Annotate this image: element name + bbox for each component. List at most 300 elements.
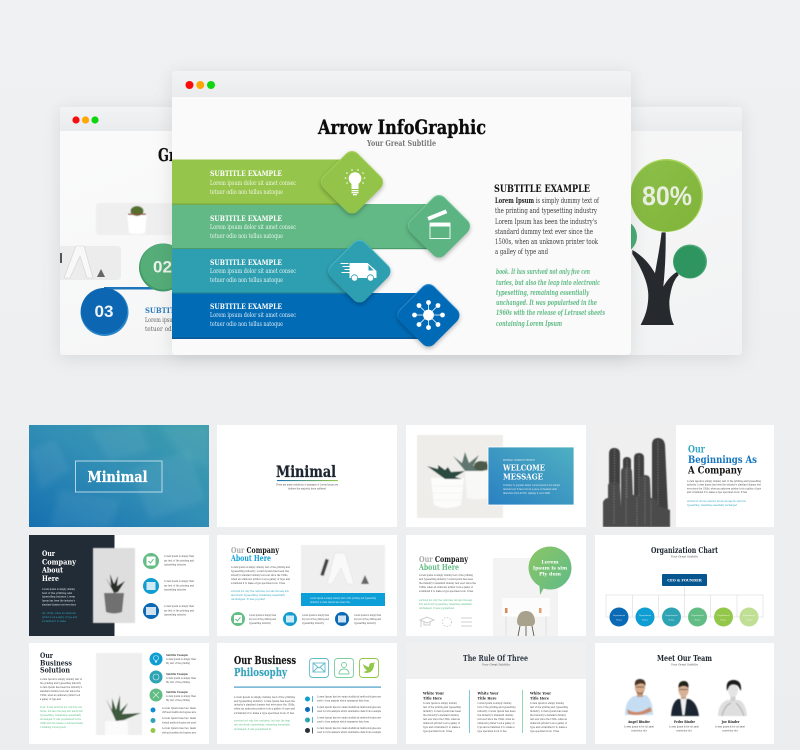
team captions <box>624 724 746 732</box>
letter A photo <box>60 246 121 280</box>
icon: delivery van <box>340 263 376 281</box>
team captions: Lorem ipsum dolor sit amet <box>624 724 655 728</box>
icon text: Subtitle Example <box>166 690 188 694</box>
column 3: text of the printing and typesetting <box>530 705 568 709</box>
check list text <box>317 694 381 734</box>
icon: check box <box>143 553 159 569</box>
slide 7: Our Company bubble <box>406 535 586 636</box>
column 1: text ever since the 1500s, when an <box>423 717 460 721</box>
speech bubble: Lorem <box>541 560 559 566</box>
welcome body: Contrary to popular belief, Lorem Ipsum is not simply <box>503 483 560 487</box>
department labels <box>613 614 755 622</box>
column 2: text of the printing and typesetting <box>478 705 516 709</box>
band 3 text <box>210 258 297 284</box>
slide background <box>406 643 586 744</box>
department labels: Name <box>746 620 753 622</box>
column 1: type and scrambled it to make a <box>423 725 460 729</box>
slide 11: The Rule Of Three <box>406 643 586 744</box>
department labels: Department <box>691 614 704 617</box>
icon row text: typesetting industry <box>302 621 324 625</box>
body text: Lorem Ipsum is simply dummy text of the printing and typesetting <box>687 479 761 483</box>
arrow band 3 <box>172 249 372 294</box>
subtitle fragment 03: SUBTITLE <box>145 306 185 315</box>
list text: typesetting industry <box>164 612 186 616</box>
column 1: unknown printer took a galley of <box>423 721 461 725</box>
teal text: survived not only five centuries, but also the leap into electronic <box>687 499 746 503</box>
teal text <box>42 611 77 623</box>
department labels: Name <box>720 620 727 622</box>
caption <box>276 482 338 490</box>
body text: Lorem Ipsum is simply dummy text of the printing and <box>231 565 290 569</box>
department labels: Department <box>665 614 678 617</box>
person: Joe Binder <box>718 680 747 716</box>
right column body text: the printing and typesetting industry <box>495 206 598 215</box>
slide 4: Our Beginnings <box>595 425 774 527</box>
plant photo <box>93 548 135 623</box>
body text: Lorem Ipsum is simply dummy text of the printing <box>234 695 295 699</box>
band 1 text: Lorem ipsum dolor sit amet consec <box>210 180 297 187</box>
right column green italic text: book. It has survived not only five cen <box>496 267 590 276</box>
diamond 3 with delivery van icon <box>325 237 394 306</box>
body text: when an unknown printer took a galley of type and <box>234 706 295 710</box>
check list: virtual methodologies are <box>161 730 196 734</box>
slide background <box>217 425 397 527</box>
body text: typesetting industry. Lorem Ipsum has been the <box>231 569 289 573</box>
band 3 text: SUBTITLE EXAMPLE <box>210 258 282 267</box>
80% circle <box>630 159 703 232</box>
green text: turies, but also the leap into electronic <box>40 709 83 713</box>
column 2 <box>477 690 516 733</box>
teal text: scrambled it to make <box>42 619 66 623</box>
check list <box>305 694 381 734</box>
welcome heading <box>502 462 545 482</box>
check list text: used to form analysis which summarize data from a sample <box>317 709 381 713</box>
heading: Company <box>42 558 77 566</box>
column 1: industry. Lorem Ipsum has been <box>423 709 461 713</box>
teal text <box>687 499 746 507</box>
heading: Our Company <box>419 554 468 564</box>
slide background <box>217 535 397 636</box>
department labels: Name <box>668 620 675 622</box>
body text: scrambled it to make a type specimen book. It has <box>234 711 294 715</box>
right column body text: a galley of type and <box>495 247 548 256</box>
heading: Our Business <box>234 653 296 667</box>
body text: 1500s, when an unknown printer took a galley of <box>419 585 474 589</box>
list text: Lorem Ipsum is simply than <box>164 554 194 558</box>
heading: Beginnings As <box>688 455 757 466</box>
green text <box>40 705 83 729</box>
slide background <box>29 643 209 744</box>
body text: the industry's standard dummy text ever since the <box>419 581 476 585</box>
band 4 text: Lorem ipsum dolor sit amet consec <box>210 312 297 319</box>
check list <box>150 706 196 734</box>
icon: window panel <box>335 612 349 626</box>
diamond 4 with network icon <box>394 281 463 350</box>
cover title: Minimal <box>88 468 148 486</box>
green text: unchanged. It was popularised in <box>234 727 271 731</box>
person: Angel Binder <box>625 679 653 715</box>
right column green italic text: typesetting, remaining essentially <box>496 288 590 297</box>
body text: ever since the 1500s, when an unknown printer took a galley of type <box>687 486 761 490</box>
band 3 text: Lorem ipsum dolor sit amet consec <box>210 268 297 275</box>
welcome body <box>503 483 560 495</box>
band 3 text: tetuer odio non tellus natoque <box>210 277 283 284</box>
desk photo <box>493 558 558 636</box>
team captions: consectetur odio <box>631 728 647 732</box>
arrow band 4 <box>172 293 437 339</box>
column 1: Title Here <box>423 696 442 700</box>
subtitle fragment 03: tetuer odio <box>145 326 177 333</box>
welcome heading: MESSAGE <box>503 472 543 482</box>
column 3: type specimen book. It has <box>530 729 559 733</box>
department labels: Department <box>743 614 755 617</box>
slide 12: Meet Our Team <box>595 643 774 744</box>
department labels: Name <box>694 620 701 622</box>
list text: my text of the printing and <box>164 584 194 588</box>
icon text <box>166 653 196 702</box>
title: Minimal <box>276 462 336 481</box>
list text: typesetting industry <box>164 562 186 566</box>
plant photo <box>417 435 503 518</box>
body text <box>687 479 762 494</box>
column 2: Lorem Ipsum is simply dummy <box>478 701 512 705</box>
speech bubble <box>528 547 572 595</box>
department circles <box>610 608 758 626</box>
check list text: used to form analysis which summarize data from <box>317 698 369 702</box>
green text: unchanged. It was popularised <box>419 606 454 610</box>
right column body text: Lorem Ipsum has been the industry's <box>495 217 597 226</box>
heading: Solution <box>40 666 70 674</box>
icon row text: my text of the printing and <box>249 617 276 621</box>
icon: bird square <box>360 658 378 678</box>
list text: my text of the printing and <box>164 608 194 612</box>
team captions: Lorem ipsum dolor sit amet <box>715 724 746 728</box>
person: Pedro Binder <box>671 681 699 716</box>
body text: text of the printing and <box>42 591 72 595</box>
subtitle fragment 03 <box>145 306 185 333</box>
column 3: type and scrambled it to make a <box>530 725 567 729</box>
icon row <box>231 612 381 626</box>
front window: Arrow InfoGraphic slide <box>172 71 631 355</box>
heading: Our <box>42 549 56 558</box>
body text: and typesetting industry. Lorem Ipsum has been <box>419 577 473 581</box>
tree trunk <box>632 232 679 325</box>
band 2 text: SUBTITLE EXAMPLE <box>210 214 282 223</box>
heading <box>230 545 279 563</box>
body text <box>234 695 295 715</box>
icon list <box>143 553 194 619</box>
body text <box>231 565 290 585</box>
column 3: the industry's standard dummy <box>530 713 566 717</box>
connector line <box>104 287 174 290</box>
team names <box>627 719 740 724</box>
welcome eyebrow: MINIMAL COMPANY PROFILE <box>503 458 535 462</box>
slide 8: Organization chart <box>595 535 774 636</box>
front window traffic lights <box>186 81 215 89</box>
department labels: Name <box>616 620 623 622</box>
green text: into electronic typesetting, remaining essentially <box>234 722 290 726</box>
check list: virtual methodologies are <box>161 710 196 714</box>
icon text: Subtitle Example <box>166 672 188 676</box>
teal text: typesetting, remaining essentially unchanged <box>687 503 737 507</box>
column 2: type and scrambled it to make a <box>478 725 515 729</box>
heading: Our <box>40 651 54 660</box>
subtitle: Your Great Subtitle <box>670 662 698 666</box>
circle 03 <box>80 288 128 336</box>
cactus photo <box>595 425 676 527</box>
column 3: White Your <box>529 690 552 696</box>
aloe photo <box>96 653 142 735</box>
band 1 text: SUBTITLE EXAMPLE <box>210 169 282 178</box>
welcome body: random text. It has roots in a piece of classical Latin <box>503 487 557 491</box>
column 1: the industry's standard dummy <box>423 713 459 717</box>
right column green italic text <box>496 267 605 328</box>
teal text: unchanged. It was popular <box>231 597 265 601</box>
heading: Our Company <box>231 545 279 555</box>
front plant <box>427 465 465 479</box>
heading <box>41 549 77 583</box>
icon row text: Lorem Ipsum is simply than <box>302 613 329 617</box>
body text: standard dummy text ever since <box>42 602 76 606</box>
column 1: type specimen book. It has <box>423 729 452 733</box>
divider rule <box>234 686 381 688</box>
subtitle: Your Great Subtitle <box>481 662 510 666</box>
team names: Angel Binder <box>627 719 651 724</box>
circle 03: 03 <box>94 302 114 321</box>
heading <box>234 653 296 679</box>
speech bubble: Ipsum is sim <box>533 566 567 572</box>
body text: industry's standard dummy text ever since the 1500s, <box>231 573 288 577</box>
cover title box <box>76 461 162 492</box>
green text: survived not only five centuries, but also the leap <box>419 598 472 602</box>
heading <box>687 444 757 476</box>
cover gradient background <box>29 425 209 527</box>
right column green italic text: turies, but also the leap into electronic <box>496 278 600 287</box>
tree chart <box>603 159 707 325</box>
slide background <box>406 425 586 527</box>
teal text: electronic typesetting, remaining essentially <box>231 593 285 597</box>
body text <box>419 573 476 593</box>
heading: About Here <box>230 553 271 563</box>
list text: typesetting industry <box>164 588 186 592</box>
band 2 text: Lorem ipsum dolor sit amet consec <box>210 224 297 231</box>
right column body text <box>495 196 600 256</box>
slide 10: Our Business Philosophy <box>217 643 397 744</box>
icon text: Subtitle Example <box>166 653 188 657</box>
department labels: Department <box>717 614 730 617</box>
band 4 text <box>210 302 297 328</box>
icon text: My text of the printing <box>166 698 190 702</box>
back plant <box>453 452 488 472</box>
team names: Joe Binder <box>721 719 740 724</box>
right column body text: 1500s, when an unknown printer took <box>495 237 598 246</box>
right column heading: SUBTITLE EXAMPLE <box>494 184 590 195</box>
body text <box>42 587 76 606</box>
circle 02: 02 <box>153 258 172 276</box>
column 2: the industry's standard dummy <box>478 713 514 717</box>
list text: Lorem Ipsum is simply than <box>164 579 194 583</box>
slide 9: Our Business Solution <box>29 643 209 744</box>
cactus photo <box>96 203 186 235</box>
heading: Philosophy <box>234 665 287 679</box>
icon: light bulb <box>345 169 365 195</box>
check list: Lorem Ipsum has two main <box>162 706 196 710</box>
green text: survived not only five centuries, but also the leap <box>234 718 290 722</box>
check list text: Lorem Ipsum has two main statistical methodologies are <box>317 726 381 730</box>
column 1: Lorem Ipsum is simply dummy <box>423 701 457 705</box>
grey icons <box>420 617 472 627</box>
right column green italic text: 1960s with the release of Letraset sheets <box>496 308 605 317</box>
icon: window panel <box>143 603 159 619</box>
slide 3: Welcome message <box>406 425 586 527</box>
heading: Here <box>42 574 59 583</box>
heading <box>40 651 72 674</box>
check list: virtual methodologies are used <box>161 720 196 724</box>
green text: typesetting, remaining essentially <box>40 713 81 717</box>
body text: standard dummy text ever since the <box>40 689 80 693</box>
letter A photo <box>301 545 385 593</box>
right column green italic text: containing Lorem Ipsum <box>496 319 562 328</box>
check list: Lorem Ipsum has two main <box>162 726 196 730</box>
heading: A Company <box>687 466 743 476</box>
title: Meet Our Team <box>657 653 712 663</box>
team captions: consectetur odio <box>676 728 692 732</box>
slide 6: Our Company About Here photo <box>217 535 397 636</box>
green text: into electronic typesetting, remaining essentially <box>419 602 472 606</box>
icon: teal circle <box>150 670 162 684</box>
green text <box>234 718 290 731</box>
diamond 1 with light bulb icon <box>318 148 386 217</box>
blue caption band: Lorem Ipsum is simply dummy text of the printing and typesetting <box>310 596 376 600</box>
body text: industry's standard dummy text ever since the 1500s, <box>234 702 295 706</box>
arrow band 2 <box>172 204 447 249</box>
column 3: unknown printer took a galley of <box>530 721 568 725</box>
band 2 text <box>210 214 297 240</box>
body text: Ipsum has been the industry's <box>42 598 75 602</box>
column 2: unknown printer took a galley of <box>478 721 515 725</box>
check list text: used to form analysis which summarize data from <box>317 720 369 724</box>
back pot <box>465 471 489 500</box>
check list text: Lorem Ipsum has two main statistical methodologies are <box>317 716 381 720</box>
subtitle fragment 03: Lorem ipsum <box>145 317 177 324</box>
blue caption band: industry Lorem Ipsum has been the <box>310 600 350 604</box>
icon row text: my text of the printing and <box>354 617 381 621</box>
heading: Business <box>40 658 72 668</box>
body text: scrambled it to make a type specimen book. It has <box>419 589 473 593</box>
column 3 <box>529 690 568 733</box>
diamond 2 with clapperboard icon <box>405 192 473 261</box>
arrow band 1 <box>172 160 357 205</box>
CEO box <box>662 574 707 586</box>
left leaf circle <box>603 220 637 254</box>
blue caption band <box>301 593 385 606</box>
check list text: Lorem Ipsum has two main statistical methodologies are <box>317 694 381 698</box>
department labels: Department <box>639 614 651 617</box>
icon text: My text of the printing <box>166 661 190 665</box>
right column body text: standard dummy text ever since the <box>495 227 593 236</box>
column 3: Title Here <box>530 696 549 700</box>
department labels: Name <box>642 620 649 622</box>
teal text: the 1500s, when an unknown <box>42 611 76 615</box>
icon: check box <box>231 612 245 626</box>
column 3: industry. Lorem Ipsum has been <box>530 709 568 713</box>
green text: 1960s with the release of Letraset sheets <box>40 721 83 725</box>
body text: the printing and typesetting industry <box>40 681 81 685</box>
check list: Lorem Ipsum has two main <box>162 716 196 720</box>
column 1: text of the printing and typesetting <box>423 705 461 709</box>
front window frame <box>172 71 631 355</box>
column 3: Lorem Ipsum is simply dummy <box>530 701 564 705</box>
icon row text: Lorem Ipsum is simply than <box>249 613 276 617</box>
body text: Lorem Ipsum is simply dummy <box>42 587 75 591</box>
cover facet pattern <box>29 425 209 527</box>
body text: 1500s, when an unknown printer took <box>40 693 80 697</box>
team captions: Lorem ipsum dolor sit amet <box>669 724 700 728</box>
body text: a galley of type and <box>40 697 61 701</box>
slide 2: Minimal title <box>217 425 397 527</box>
icon row text: typesetting industry <box>354 621 376 625</box>
icon row text <box>249 613 381 625</box>
green text: book. It has survived not only five cen <box>40 705 82 709</box>
green text <box>419 598 472 610</box>
icon: browser panel <box>283 612 297 626</box>
grey header band <box>406 643 586 679</box>
column dividers <box>469 690 523 733</box>
green text: containing Lorem Ipsum <box>40 725 66 729</box>
icon: green circle <box>150 688 162 702</box>
icon: browser panel <box>143 578 159 594</box>
green text: unchanged. It was popularised in the <box>40 717 81 721</box>
body text: industry. Lorem Ipsum has been the industry's standard dummy text <box>687 482 762 486</box>
welcome box <box>488 447 574 505</box>
body text <box>40 677 83 701</box>
body text: when an unknown printer took a galley of type and <box>231 577 290 581</box>
80% circle: 80% <box>642 181 692 211</box>
icon: person square <box>334 658 354 678</box>
column 2: Title Here <box>478 696 497 700</box>
body text: and scrambled it to make a type specimen book. It has <box>687 490 747 494</box>
list text: my text of the printing and <box>164 558 194 562</box>
band 4 text: tetuer odio non tellus natoque <box>210 321 283 328</box>
teal text <box>231 589 289 601</box>
circle 02 <box>139 244 187 292</box>
slide background <box>595 535 774 636</box>
icon: bulb circle <box>150 652 162 666</box>
icon text: My text of the printing <box>166 680 190 684</box>
icon: clapperboard <box>428 210 450 238</box>
team names: Pedro Binder <box>674 719 696 724</box>
column 2: industry. Lorem Ipsum has been <box>478 709 516 713</box>
caption: believe the majority have suffered <box>288 486 326 490</box>
check list text: used to form analysis which summarize data from a sample <box>317 730 381 734</box>
main subtitle: Your Great Subtitle <box>366 139 436 149</box>
column 2: White Your <box>477 690 499 696</box>
right column body text: Lorem Ipsum is simply dummy text of <box>495 196 600 205</box>
icon row text: typesetting industry <box>249 621 271 625</box>
slide background <box>595 425 774 527</box>
speech bubble: Ply dum <box>539 572 561 578</box>
chart title: Organization Chart <box>651 545 718 555</box>
band 4 text: SUBTITLE EXAMPLE <box>210 302 282 311</box>
right leaf circle <box>673 244 707 278</box>
band 1 text <box>210 169 297 196</box>
back window traffic lights <box>72 116 99 124</box>
column 1 <box>422 690 461 733</box>
right column green italic text: unchanged. It was popularised in the <box>496 298 597 307</box>
column 2: type specimen book. It has <box>478 729 507 733</box>
heading: About <box>41 566 63 574</box>
department labels: Department <box>613 614 625 617</box>
